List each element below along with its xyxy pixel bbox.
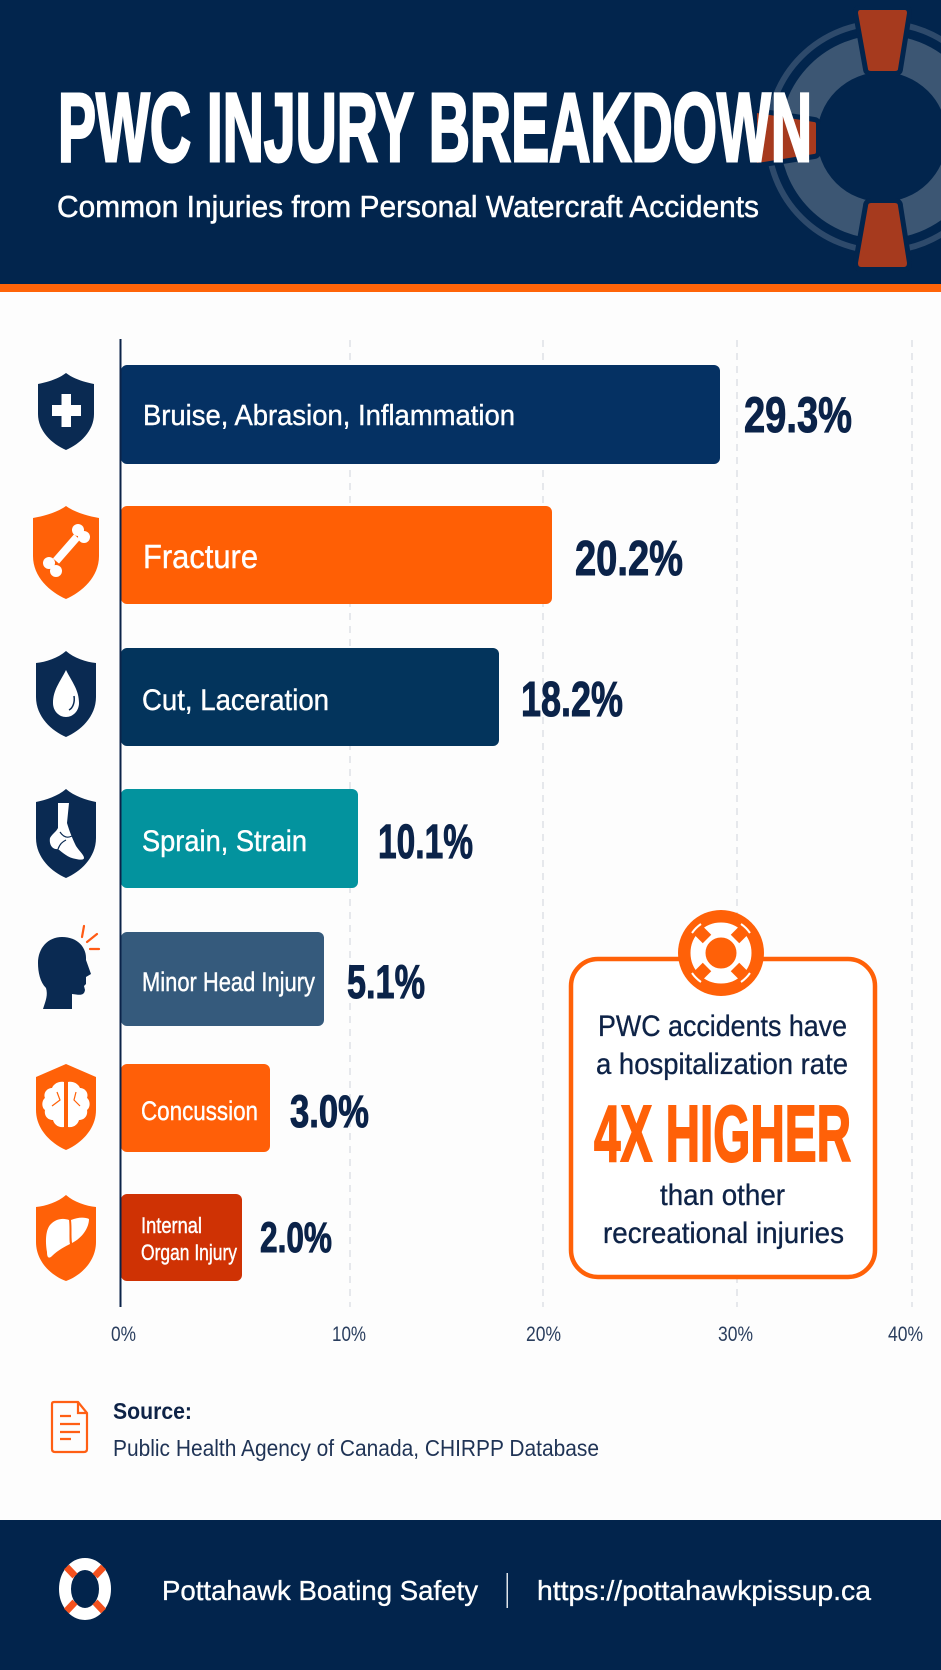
icon: life ring badge [678,910,764,996]
icon: shield with brain [36,1064,96,1150]
bar: minor head injury [121,932,425,1026]
bar: internal organ injury [121,1194,332,1281]
bar: cut, laceration: 18.2% [521,673,623,727]
bar: cut, laceration [121,648,623,746]
bar: sprain, strain [121,789,473,888]
icon: head with impact [38,926,99,1009]
callout text: a hospitalization rate [596,1048,848,1081]
bar: sprain, strain: Sprain, Strain [142,825,307,858]
icon: shield with blood drop [36,651,96,737]
bar: bruise, abrasion, inflammation: Bruise, Abrasion, Inflammation [143,400,515,432]
x axis labels: 30% [718,1323,753,1346]
bar: fracture: Fracture [143,538,258,575]
callout text [594,1010,851,1250]
subtitle: Common Injuries from Personal Watercraft Accidents [57,189,759,224]
icon: document [52,1402,87,1452]
bar: cut, laceration: Cut, Laceration [142,684,329,717]
x axis labels: 40% [888,1323,923,1346]
footer bar: Pottahawk Boating Safety [162,1575,478,1606]
bar: internal organ injury: 2.0% [260,1214,332,1262]
icon: shield with medical cross [38,373,94,450]
bar: bruise, abrasion, inflammation: 29.3% [744,387,852,443]
bar: sprain, strain: 10.1% [378,816,473,869]
bar: internal organ injury: Organ Injury [141,1240,237,1265]
callout text: than other [660,1179,785,1212]
bar: concussion [121,1064,369,1152]
header banner [0,0,941,292]
footer bar [0,1520,941,1670]
bar: minor head injury: 5.1% [347,955,425,1008]
bar: internal organ injury: Internal [141,1213,202,1238]
callout text: recreational injuries [603,1217,844,1250]
bar: minor head injury: Minor Head Injury [142,967,315,997]
x axis labels [111,1323,923,1346]
bar: fracture: 20.2% [575,532,683,586]
icon: footer life ring [65,1564,105,1614]
x axis labels: 20% [526,1323,561,1346]
bar chart [121,365,852,1281]
source: Source: [113,1398,192,1424]
icon: shield with bone [33,506,99,599]
callout [571,910,875,1277]
footer bar: https://pottahawkpissup.ca [537,1575,871,1606]
bar: fracture [121,506,683,604]
x axis labels: 10% [332,1323,366,1346]
source [52,1398,599,1461]
grid lines [350,340,912,1307]
icon: shield with liver [36,1195,96,1281]
bar: concussion: Concussion [141,1096,258,1126]
source: Public Health Agency of Canada, CHIRPP Database [113,1435,599,1461]
y axis line [120,339,122,1307]
icon: shield with ankle [36,789,96,878]
bar: concussion: 3.0% [290,1086,369,1137]
icon: life ring watermark [757,10,941,267]
callout text: PWC accidents have [598,1010,847,1043]
bar: bruise, abrasion, inflammation [121,365,852,464]
x axis labels: 0% [111,1323,136,1346]
